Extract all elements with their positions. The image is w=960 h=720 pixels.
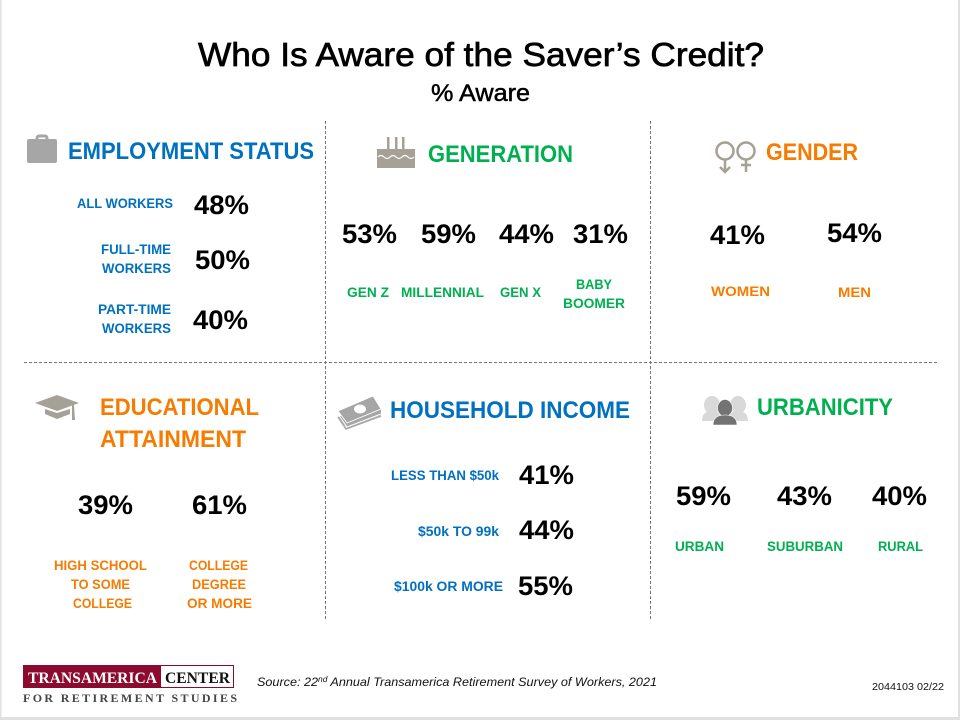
heading: urbanicity: URBANICITY — [757, 394, 893, 421]
stat: gen x: 44% — [499, 219, 554, 249]
logo: Transamerica Center: FOR RETIREMENT STUDIES — [23, 691, 237, 705]
stat: urban: URBAN — [675, 539, 724, 554]
stat: suburban: 43% — [777, 481, 832, 511]
stat: high school to some college: TO SOME — [71, 577, 130, 592]
stat: college degree or more: DEGREE — [192, 577, 246, 592]
stat: college degree or more: 61% — [192, 490, 247, 520]
stat: all workers — [77, 190, 249, 220]
stat: men: 54% — [827, 218, 882, 248]
stat: less than $50k: 41% — [519, 460, 574, 490]
heading: generation: GENERATION — [428, 141, 573, 168]
document code: 2044103 02/22 — [872, 682, 944, 693]
stat: part-time workers: WORKERS — [102, 321, 171, 336]
panel: household income — [338, 396, 630, 601]
heading: educational attainment: ATTAINMENT — [100, 426, 246, 453]
stat: women: 41% — [710, 220, 765, 250]
panel: generation — [342, 137, 628, 311]
icon: briefcase — [27, 136, 57, 163]
stat: full-time workers: 50% — [195, 245, 250, 275]
stat: high school to some college: HIGH SCHOOL — [54, 558, 147, 573]
stat: baby boomer: BABY — [576, 277, 612, 292]
stat: millennial — [401, 219, 484, 300]
stat: suburban: SUBURBAN — [767, 539, 843, 554]
stat: high school to some college — [54, 490, 147, 611]
stat: women: WOMEN — [711, 284, 770, 299]
panel: gender — [710, 139, 882, 300]
stat: baby boomer: BOOMER — [563, 296, 625, 311]
stat: women — [710, 220, 770, 299]
logo: Transamerica Center: TRANSAMERICA — [28, 670, 157, 687]
stat: urban: 59% — [676, 481, 731, 511]
stat: high school to some college: COLLEGE — [73, 596, 132, 611]
heading: educational attainment — [100, 394, 259, 453]
icon: money stack — [338, 396, 381, 429]
stat: baby boomer: 31% — [573, 219, 628, 249]
stat: $50k to 99k — [418, 515, 574, 545]
source note: nd — [318, 675, 328, 684]
logo: Transamerica Center: CENTER — [165, 670, 230, 687]
stat: college degree or more: COLLEGE — [189, 558, 248, 573]
stat: men — [827, 218, 882, 300]
heading: employment status: EMPLOYMENT STATUS — [68, 138, 314, 165]
stat: less than $50k: LESS THAN $50k — [391, 468, 499, 483]
stat: $50k to 99k: 44% — [519, 515, 574, 545]
stat: college degree or more: OR MORE — [187, 596, 252, 611]
stat: part-time workers: PART-TIME — [98, 302, 171, 317]
stat: full-time workers: FULL-TIME — [101, 242, 171, 257]
stat: all workers: ALL WORKERS — [77, 196, 173, 211]
stat: men: MEN — [838, 285, 871, 300]
stat: full-time workers — [101, 242, 250, 276]
stat: college degree or more — [187, 490, 252, 611]
stat: gen z: GEN Z — [347, 285, 389, 300]
stat: high school to some college: 39% — [78, 490, 133, 520]
stat: rural: 40% — [872, 481, 927, 511]
stat: rural: RURAL — [878, 539, 923, 554]
heading: gender: GENDER — [766, 139, 858, 166]
stat: $100k or more — [394, 571, 573, 601]
stat: full-time workers: WORKERS — [102, 261, 171, 276]
stat: gen x — [499, 219, 554, 300]
stat: urban — [675, 481, 731, 554]
panel: urbanicity — [675, 394, 927, 554]
icon: graduation cap — [35, 395, 79, 420]
stat: all workers: 48% — [194, 190, 249, 220]
stat: millennial: MILLENNIAL — [401, 285, 484, 300]
stat: $100k or more: 55% — [518, 571, 573, 601]
stat: gen x: GEN X — [500, 285, 541, 300]
stat: millennial: 59% — [421, 219, 476, 249]
heading: educational attainment: EDUCATIONAL — [100, 394, 259, 421]
stat: part-time workers: 40% — [193, 305, 248, 335]
icon: gender symbols — [716, 142, 754, 172]
icon: cake — [377, 137, 415, 168]
source note: Annual Transamerica Retirement Survey of Workers, 2021 — [327, 675, 657, 689]
subtitle: % Aware — [431, 80, 530, 107]
panel: employment status — [27, 136, 314, 336]
heading: household income: HOUSEHOLD INCOME — [390, 397, 630, 424]
stat: suburban — [767, 481, 843, 554]
icon: people — [702, 396, 748, 425]
source note: Source: 22 — [257, 675, 315, 689]
stat: less than $50k — [391, 460, 574, 490]
panel: educational attainment — [35, 394, 259, 611]
stat: $50k to 99k: $50k TO 99k — [418, 524, 500, 539]
logo: Transamerica Center — [23, 665, 237, 705]
stat: $100k or more: $100k OR MORE — [394, 579, 503, 594]
stat: rural — [872, 481, 927, 554]
stat: baby boomer — [563, 219, 628, 311]
title: Who Is Aware of the Saver’s Credit? — [198, 36, 764, 73]
stat: gen z: 53% — [342, 219, 397, 249]
stat: gen z — [342, 219, 397, 300]
stat: part-time workers — [98, 302, 248, 336]
